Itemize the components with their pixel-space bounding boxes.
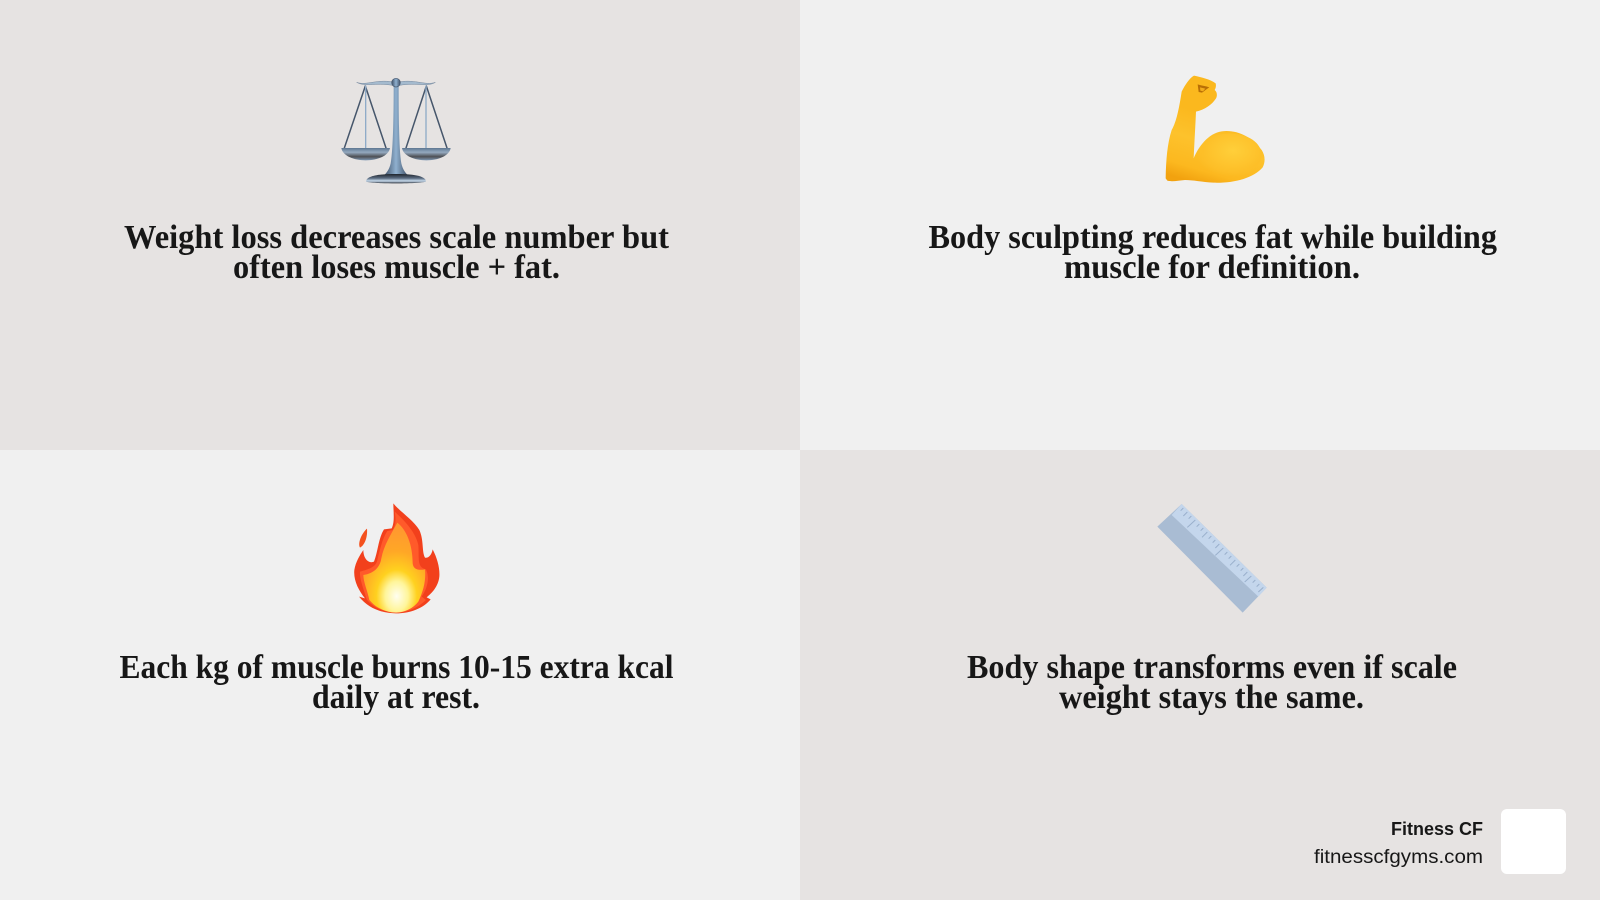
heading: body sculpting: muscle for definition. <box>1064 249 1360 286</box>
heading: body sculpting: Body sculpting reduces fat while building <box>928 219 1497 256</box>
heading: body shape: Body shape transforms even if scale <box>967 649 1457 686</box>
icon: flexed biceps <box>1166 76 1265 183</box>
icon: balance scale <box>341 78 451 183</box>
heading: muscle metabolism: daily at rest. <box>312 679 480 716</box>
icon: fire <box>354 503 439 613</box>
panel: muscle metabolism <box>0 450 800 900</box>
icon: ruler <box>1157 504 1267 613</box>
panel: weight loss <box>0 0 800 450</box>
logo placeholder <box>1501 809 1566 874</box>
heading: weight loss: Weight loss decreases scale number but <box>124 219 670 256</box>
heading: weight loss: often loses muscle + fat. <box>233 249 560 286</box>
brand url: fitnesscfgyms.com <box>1314 847 1483 868</box>
panel: body sculpting <box>800 0 1600 450</box>
heading: body shape: weight stays the same. <box>1059 679 1364 716</box>
brand name: Fitness CF <box>1391 818 1483 839</box>
panel: body shape <box>800 450 1600 900</box>
brand block <box>1314 809 1566 874</box>
heading: muscle metabolism: Each kg of muscle burns 10-15 extra kcal <box>120 649 674 686</box>
